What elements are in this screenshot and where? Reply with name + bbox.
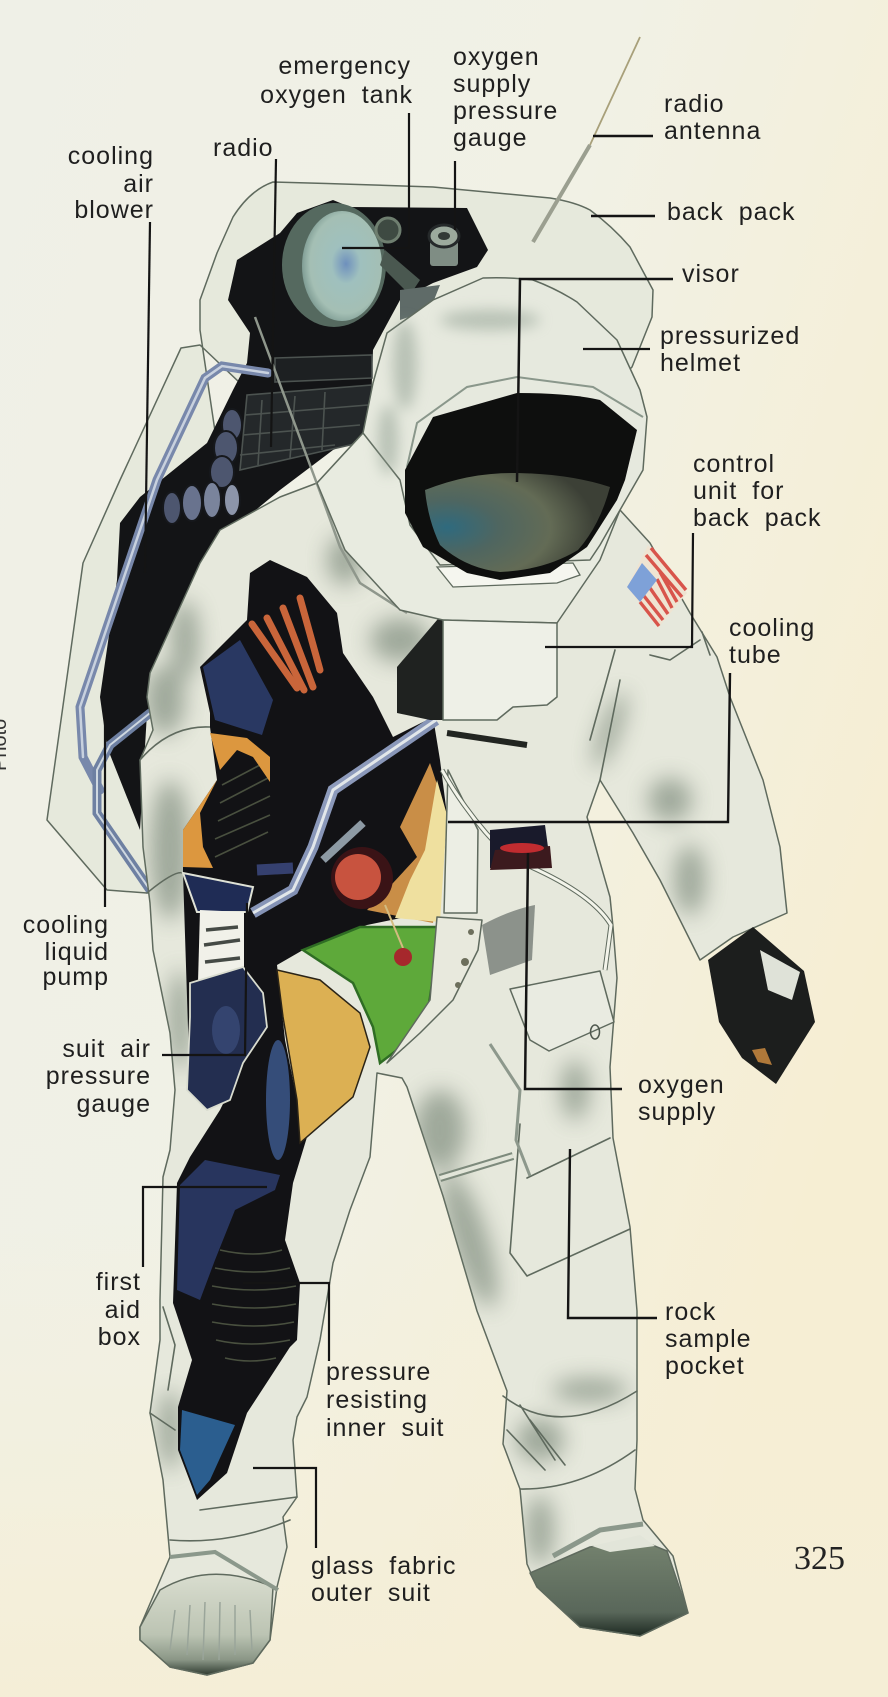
waist strap — [447, 733, 527, 745]
corrugated inner suit ribs — [212, 765, 296, 1361]
back pack shell — [47, 182, 653, 893]
label: pressurized helmet: helmet — [660, 349, 741, 377]
back pack dark interior — [100, 200, 488, 830]
label: pressure resisting inner suit: pressure — [326, 1358, 431, 1386]
pressure gauge fitting — [400, 225, 459, 320]
red oxygen supply device — [490, 825, 552, 870]
suit silhouette — [140, 380, 787, 1675]
label: emergency oxygen tank: oxygen tank — [260, 81, 413, 109]
purple strap — [257, 868, 293, 870]
cutaway inner suit — [173, 560, 447, 1500]
visor reflection — [425, 473, 610, 572]
collar and neck — [317, 417, 643, 623]
oxygen tube highlight — [442, 770, 611, 970]
label: rock sample pocket: rock — [665, 1298, 716, 1326]
label: glass fabric outer suit: outer suit — [311, 1579, 431, 1607]
right leg pocket flap — [510, 971, 614, 1051]
closure rivets — [455, 929, 474, 988]
corrugated hose stack — [163, 409, 242, 524]
left wrist and glove — [183, 873, 267, 1110]
orange cooling ribs — [252, 598, 320, 690]
label: emergency oxygen tank: emergency — [278, 52, 411, 80]
label: control unit for back pack: control — [693, 450, 775, 478]
label: rock sample pocket: sample — [665, 1325, 752, 1353]
label: cooling tube: tube — [729, 641, 782, 669]
label: pressure resisting inner suit: inner suit — [326, 1414, 444, 1442]
rock sample pocket — [510, 1124, 630, 1276]
label: cooling air blower: air — [123, 170, 154, 198]
suit front closure — [387, 917, 482, 1063]
label: cooling air blower: cooling — [68, 142, 154, 170]
yellow inner liner — [367, 763, 447, 923]
label: back pack: back pack — [667, 198, 796, 226]
label: suit air pressure gauge: gauge — [76, 1090, 151, 1118]
label: first aid box: box — [98, 1323, 141, 1351]
belt — [482, 905, 535, 975]
red valve disc — [331, 847, 412, 966]
white chest strip — [444, 770, 478, 913]
flag patch — [627, 545, 687, 628]
label: oxygen supply: supply — [638, 1098, 716, 1126]
label: cooling liquid pump: pump — [42, 963, 109, 991]
sleeve and elbow seams — [140, 632, 710, 1541]
left boot — [140, 1552, 278, 1675]
nozzle tube — [323, 823, 363, 860]
label: cooling tube: cooling — [729, 614, 815, 642]
chest control unit — [443, 620, 557, 720]
thigh seam and strap — [440, 1044, 530, 1178]
label: first aid box: aid — [105, 1296, 141, 1324]
helmet shading — [378, 310, 540, 475]
blue padding — [177, 640, 290, 1495]
label: control unit for back pack: back pack — [693, 504, 822, 532]
label: cooling liquid pump: cooling — [23, 911, 109, 939]
page number: 325 — [794, 1540, 845, 1577]
label: cooling liquid pump: liquid — [45, 938, 109, 966]
knee folds — [503, 1391, 637, 1489]
antenna — [533, 37, 640, 242]
label: oxygen supply pressure gauge: pressure — [453, 97, 558, 125]
right glove — [708, 927, 815, 1084]
cooling hoses behind body — [80, 366, 268, 890]
label: rock sample pocket: pocket — [665, 1352, 745, 1380]
right boot — [530, 1524, 688, 1636]
orange elbow patch — [183, 733, 270, 868]
label: cooling air blower: blower — [74, 196, 154, 224]
label: pressurized helmet: pressurized — [660, 322, 800, 350]
label: suit air pressure gauge: suit air — [62, 1035, 151, 1063]
label: first aid box: first — [96, 1268, 141, 1296]
label: control unit for back pack: unit for — [693, 477, 784, 505]
visor rim — [407, 377, 643, 467]
label: radio antenna: radio — [664, 90, 725, 118]
label: oxygen supply pressure gauge: supply — [453, 70, 531, 98]
tube highlight — [253, 720, 436, 913]
collar connector — [397, 613, 443, 720]
label: oxygen supply: oxygen — [638, 1071, 725, 1099]
emergency oxygen tank — [282, 203, 420, 327]
label: oxygen supply pressure gauge: oxygen — [453, 43, 540, 71]
leader lines — [105, 113, 730, 1548]
label: pressure resisting inner suit: resisting — [326, 1386, 428, 1414]
flap snap — [590, 1025, 600, 1039]
label: oxygen supply pressure gauge: gauge — [453, 124, 528, 152]
oxygen tube on torso — [442, 770, 611, 970]
radio unit grille — [240, 355, 372, 470]
yellow padded thigh — [277, 970, 370, 1143]
helmet hood — [363, 278, 647, 565]
green undergarment — [303, 927, 437, 1063]
label: radio antenna: antenna — [664, 117, 761, 145]
neck rod and collar tube — [255, 317, 407, 613]
label: radio: radio — [213, 134, 274, 162]
label: glass fabric outer suit: glass fabric — [311, 1552, 456, 1580]
blue cooling tube across torso — [253, 720, 436, 913]
label: visor: visor — [682, 260, 740, 288]
visor — [405, 393, 637, 580]
suit shading — [130, 535, 706, 1680]
label: suit air pressure gauge: pressure — [46, 1062, 151, 1090]
